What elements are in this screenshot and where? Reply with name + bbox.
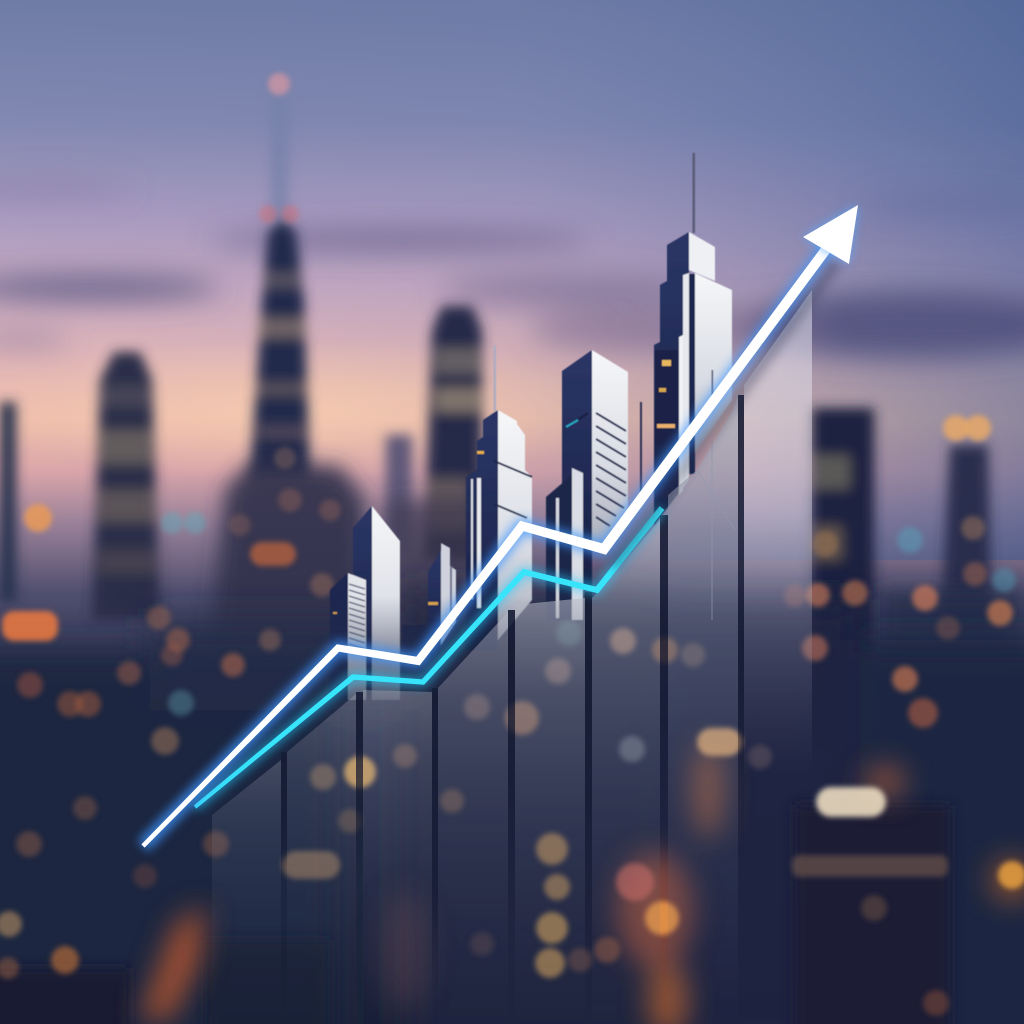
arrow glow <box>143 244 830 846</box>
column dividers <box>281 395 744 993</box>
tower base lines <box>697 440 735 620</box>
arrow head <box>803 205 858 264</box>
background: hazy mid city <box>210 462 1024 760</box>
glass column 2 <box>287 694 356 1024</box>
tower: far left pair <box>330 506 400 700</box>
small blurred buildings <box>386 435 412 555</box>
blurred center tower <box>424 306 482 560</box>
tower: small middle <box>402 542 457 647</box>
tower: stepped <box>466 345 532 650</box>
skyscraper models <box>330 153 732 700</box>
arrow shadow on glass <box>612 262 836 566</box>
glass column 8 <box>744 290 812 780</box>
cyan line glow <box>195 508 662 807</box>
cyan line <box>194 506 664 809</box>
glass column 4 <box>438 612 508 1024</box>
background: near dark blocks <box>0 805 950 1024</box>
white growth arrow <box>141 205 858 848</box>
background: dark lower city <box>0 590 1024 1024</box>
arrow head glow <box>803 205 858 264</box>
tower: tallest <box>654 153 732 525</box>
cyan trend line <box>194 506 664 809</box>
background: blurred clouds <box>0 178 1024 359</box>
glass column 6 <box>592 520 660 1024</box>
background: blurred skyline <box>0 95 992 748</box>
glass chart columns <box>212 290 812 1024</box>
glass column 5 <box>515 598 585 1024</box>
glass column 7 <box>668 395 738 1024</box>
tower: main middle <box>546 350 642 620</box>
glass column 1 <box>212 760 281 1024</box>
blurred left tower <box>92 352 160 620</box>
arrow shaft <box>141 241 834 848</box>
blurred spire tower <box>250 95 310 480</box>
background: warm street glows <box>140 742 1024 1024</box>
glass column 3 <box>363 690 432 1024</box>
